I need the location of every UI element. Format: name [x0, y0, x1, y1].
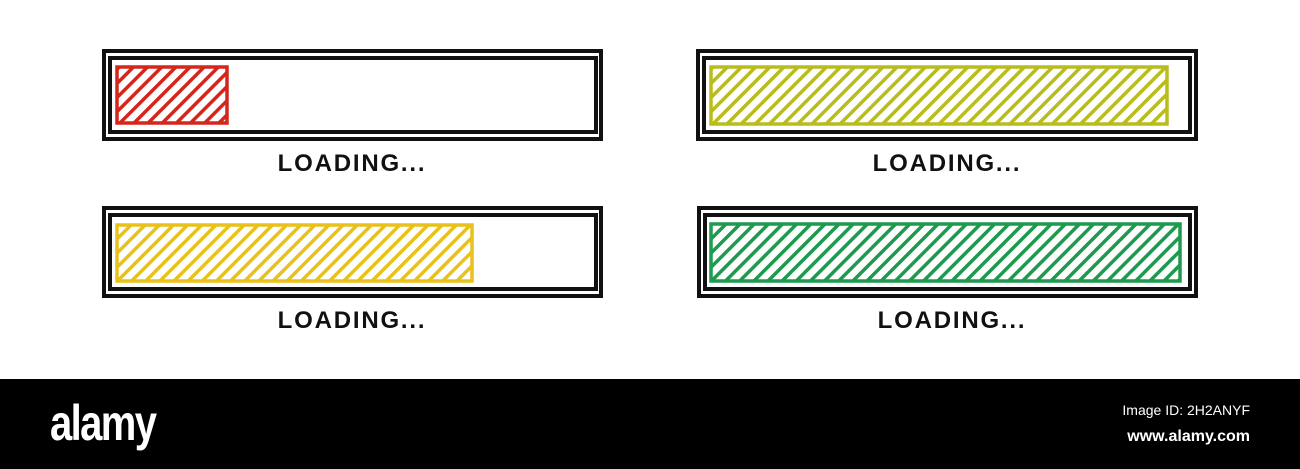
website: www.alamy.com: [1126, 428, 1250, 445]
bar 3: yellow: [104, 208, 601, 334]
image id: Image ID: 2H2ANYF: [1122, 402, 1250, 418]
bar 3: yellow: LOADING...: [278, 307, 426, 334]
bar 1: red: [104, 51, 601, 177]
bar 2: lime: LOADING...: [873, 150, 1021, 177]
logo: alamy: alamy: [50, 395, 157, 451]
bar 4: green: LOADING...: [878, 307, 1026, 334]
bar 2: lime: [698, 51, 1196, 177]
footer bar: [0, 379, 1300, 469]
bar 4: green: [699, 208, 1196, 334]
bar 1: red: LOADING...: [278, 150, 426, 177]
